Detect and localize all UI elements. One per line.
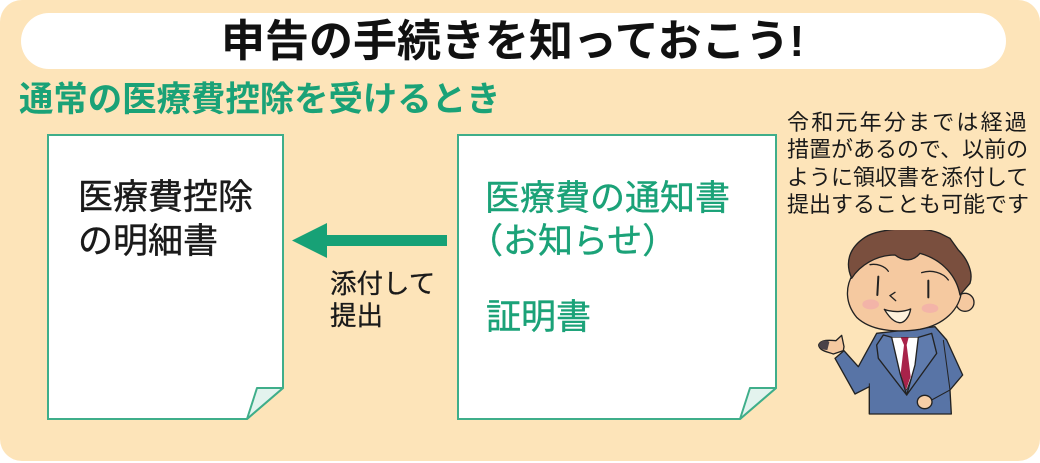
face [847,248,974,331]
speech note: 提出することも可能です [787,192,1029,217]
title banner [21,13,1006,69]
document: right sheet [457,134,777,420]
speech note: 措置があるので、以前の [787,137,1028,162]
text: left sheet [78,178,253,261]
arrow label: 提出 [330,301,383,331]
text: left sheet: 医療費控除 [78,178,253,217]
text: certificate: 証明書 [486,298,591,337]
speech note: 令和元年分までは経過 [787,110,1029,135]
text: right sheet [468,179,730,261]
hair [848,229,971,295]
icon: man in suit [818,230,975,415]
title: 申告の手続きを知っておこう! [221,17,804,66]
jacket [835,327,963,414]
subheading: 通常の医療費控除を受けるとき [19,81,500,119]
text: right sheet: 医療費の通知書 [485,179,730,218]
hands [819,335,932,409]
text: right sheet: （お知らせ） [468,222,677,261]
arrow [292,223,447,258]
speech note [787,110,1029,217]
arrow label [330,269,435,331]
text: left sheet: の明細書 [78,222,218,261]
arrow label: 添付して [330,269,435,299]
document: left sheet [47,134,284,420]
speech note: ように領収書を添付して [787,165,1028,190]
